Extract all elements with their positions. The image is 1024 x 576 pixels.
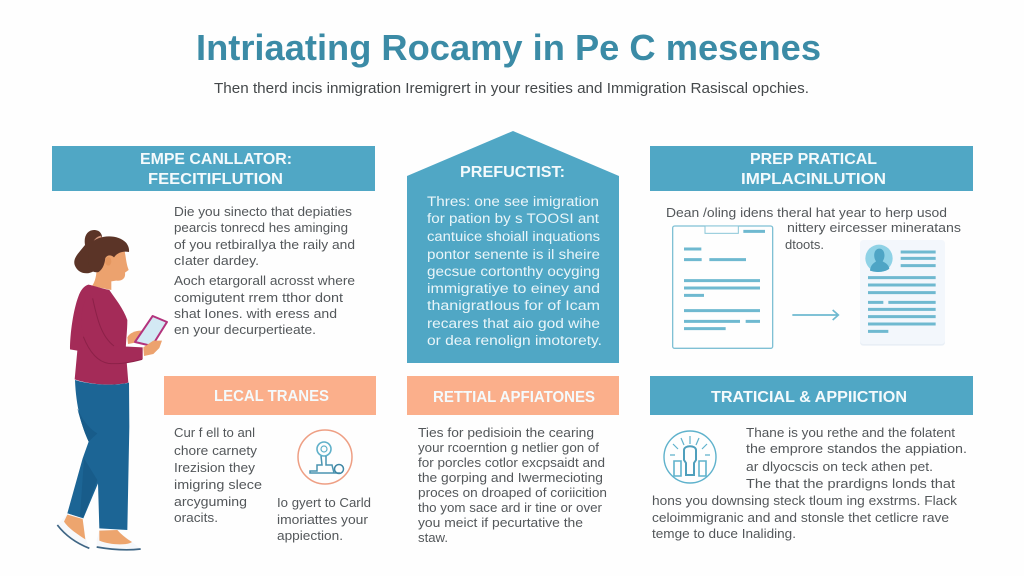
text block: top left: en your decurpertieate. — [174, 322, 316, 337]
text block: bottom right: celoimmigranic and and stonsle thet cetlicre rave — [652, 510, 949, 525]
icon: document outline — [673, 226, 773, 348]
text block: bottom centre: the gorping and Iwermecioting — [418, 470, 603, 485]
text block: central house: pontor senente is il sheire — [427, 247, 600, 262]
heading banner: orange centre — [407, 376, 619, 415]
heading banner: top right: IMPLACINLUTION — [741, 171, 886, 188]
text block: bottom centre: proces on droaped of coriicition — [418, 485, 607, 500]
text block: bottom left column: imigring slece — [174, 477, 262, 492]
text block: top left: comigutent rrem tthor dont — [174, 290, 343, 305]
ponytail — [74, 230, 102, 273]
neck and face — [92, 248, 129, 290]
heading: central house: PREFUCTIST: — [460, 164, 565, 181]
text block: top right — [666, 205, 962, 252]
text block: bottom centre: staw. — [418, 530, 448, 545]
text block: under map pin icon: Io gyert to Carld — [277, 495, 371, 510]
text block: bottom right: hons you downsing steck tloum ing exstrms. Flack — [652, 493, 958, 508]
text block: bottom left column: chore carnety — [174, 443, 258, 458]
front hand — [143, 341, 162, 356]
text block: central house: thanigratIous for of Icam — [427, 298, 600, 313]
text block: bottom centre — [418, 425, 607, 545]
trousers — [67, 380, 129, 530]
sweater — [70, 285, 128, 385]
text block: bottom left column: oracits. — [174, 510, 218, 525]
text block: bottom right: ar dlyocscis on teck athen pet. — [746, 459, 933, 474]
text block: central house: recares that aio god wihe — [427, 316, 600, 331]
text block: bottom right — [652, 425, 967, 541]
right foot and shoe — [97, 530, 140, 550]
text block: top left: pearcis tonrecd hes aminging — [174, 220, 348, 235]
illustration: woman holding tablet — [57, 230, 167, 550]
text block: central house: cantuice shoiall inquations — [427, 229, 600, 244]
text block: bottom right: The that the prardigns londs that — [746, 476, 955, 491]
text block: central house: for pation by s TOOSI ant — [427, 211, 599, 226]
panel: bottom centre — [407, 376, 619, 545]
text block: top left — [174, 204, 355, 337]
text block: bottom left column: Cur f ell to anl — [174, 425, 255, 440]
heading banner: top right — [650, 146, 973, 191]
text block: bottom right: temge to duce Inaliding. — [652, 526, 796, 541]
text block: bottom centre: your rcoerntion g netlier gon of — [418, 440, 599, 455]
text block: central house: Thres: one see imigration — [427, 194, 599, 209]
left foot and shoe — [57, 513, 89, 548]
text block: bottom left column: arcyguming — [174, 494, 247, 509]
text block: bottom right: Thane is you rethe and the folatent — [746, 425, 955, 440]
text block: bottom left column: Irezision they — [174, 460, 256, 475]
text block: top right: nittery eircesser mineratans — [787, 220, 962, 235]
panel: top left — [52, 146, 375, 337]
icon: map pin in circle — [298, 430, 352, 484]
sleeve — [81, 295, 143, 364]
text block: top left: of you retbiraIlya the raily and — [174, 237, 355, 252]
text block: central house — [427, 194, 602, 348]
ear — [105, 257, 111, 266]
panel: bottom right — [650, 376, 973, 541]
subtitle: Then therd incis inmigration Iremigrert in your resities and Immigration Rasiscal opchies. — [214, 81, 809, 97]
text block: bottom centre: tho yom sace ard ir tine or over — [418, 500, 603, 515]
text block: top left: cIater dardey. — [174, 253, 259, 268]
heading banner: orange left — [164, 376, 376, 415]
heading banner: bottom right — [650, 376, 973, 415]
title: Intriaating Rocamy in Pe C mesenes — [196, 27, 821, 68]
heading banner: orange left: LECAL TRANES — [214, 388, 329, 405]
tablet — [135, 316, 167, 346]
heading banner: orange centre: RETTIAL APFIATONES — [433, 389, 595, 406]
text block: top right: dtoots. — [785, 237, 824, 252]
text block: bottom right: the emprore standos the appiation. — [746, 441, 967, 456]
text block: central house: gecsue cortonthy ocyging — [427, 264, 600, 279]
panel: bottom left — [164, 376, 376, 543]
text block: central house: immigratiye to einey and — [427, 281, 600, 296]
text block: top left: shat Iones. with eress and — [174, 306, 337, 321]
text block: under map pin icon — [277, 495, 371, 543]
text block: under map pin icon: appiection. — [277, 528, 343, 543]
heading banner: top right: PREP PRATICAL — [750, 151, 877, 168]
text block: central house: or dea renolign imotorety. — [427, 333, 602, 348]
icon: raised fist in circle — [664, 431, 716, 483]
text block: bottom centre: you meict if pecurtative the — [418, 515, 583, 530]
hair cap — [88, 236, 129, 272]
text block: top right: Dean /oling idens theral hat year to herp usod — [666, 205, 947, 220]
heading banner: top left: EMPE CANLLATOR: — [140, 151, 292, 168]
heading banner: top left: FEECITIFLUTION — [148, 171, 283, 188]
panel: top right — [650, 146, 973, 348]
arrow — [792, 310, 838, 320]
icon: profile document — [860, 240, 945, 346]
heading banner: bottom right: TRATICIAL & APPIICTION — [711, 389, 907, 406]
text block: under map pin icon: imoriattes your — [277, 512, 369, 527]
text block: top left: Die you sinecto that depiaties — [174, 204, 353, 219]
text block: bottom left column — [174, 425, 262, 525]
text block: top left: Aoch etargorall acrosst where — [174, 273, 355, 288]
heading banner: top left — [52, 146, 375, 191]
house shape — [407, 131, 619, 363]
back hand — [127, 331, 143, 344]
text block: bottom centre: for porcles cotlor excpsaidt and — [418, 455, 605, 470]
text block: bottom centre: Ties for pedisioin the cearing — [418, 425, 594, 440]
panel: central house — [407, 131, 619, 363]
